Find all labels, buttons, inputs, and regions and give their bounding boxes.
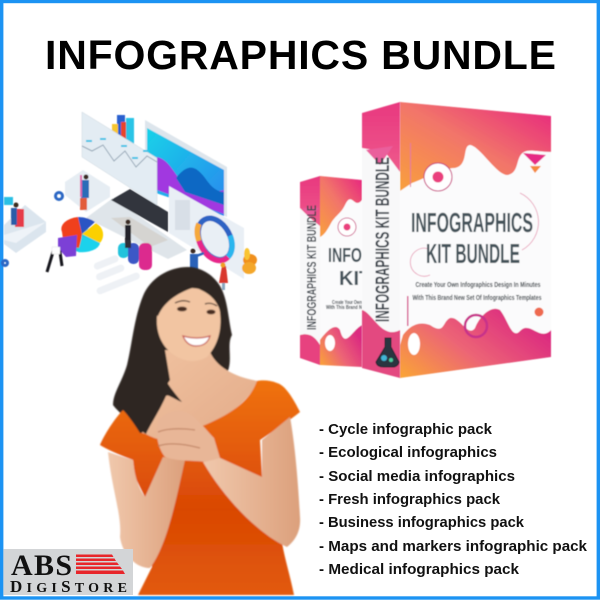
eyebrows: [175, 301, 217, 306]
worker on document stack: [65, 170, 110, 212]
large product box: KIT BUNDLE: [426, 238, 520, 269]
feature list: - Ecological infographics: [319, 445, 497, 461]
small product box: With This Brand N: [326, 305, 362, 311]
small box front: [320, 176, 362, 366]
small box spine: [300, 176, 320, 365]
percentage pills: [93, 254, 141, 295]
feature list: - Social media infographics: [319, 469, 515, 485]
desk with seated worker: [4, 197, 46, 253]
small box text: INFO: [328, 245, 362, 267]
clasped hands: [157, 411, 220, 462]
left arm: [108, 452, 185, 568]
logo: ABS DigiStore: [3, 549, 133, 596]
finger lines: [158, 429, 200, 448]
purple pie slice and figure: [47, 235, 77, 272]
woman: [100, 267, 300, 595]
bar chart icon behind panels: [112, 115, 134, 150]
large box spine: [362, 102, 400, 378]
hair strand over shoulder: [134, 345, 182, 434]
hair top: [146, 267, 224, 316]
large product box: With This Brand New Set Of Infographics Templates: [412, 293, 542, 302]
small product box: INFOGRAPHICS KIT BUNDLE: [304, 205, 319, 330]
laptop base: [86, 198, 187, 259]
feature list: [319, 422, 588, 578]
blue area chart screen: [145, 120, 227, 217]
small product box: Create Your Own: [332, 300, 362, 306]
feature list: - Business infographics pack: [319, 515, 525, 531]
flask logo on spine: [376, 338, 399, 367]
neck and chest: [140, 350, 258, 445]
illustration: isometric analytics dashboard: [2, 112, 257, 295]
large product box: [400, 102, 551, 378]
smile: [183, 336, 210, 346]
donut chart panel: [169, 186, 244, 279]
pie chart: [61, 217, 103, 252]
small product box: [300, 176, 371, 367]
small product box: KIT: [339, 268, 371, 290]
logo red stripes: [76, 554, 125, 574]
right arm: [203, 417, 300, 547]
feature list: - Maps and markers infographic pack: [319, 539, 588, 555]
box decorative circles: [407, 143, 546, 355]
feature list: - Medical infographics pack: [319, 562, 520, 578]
logo letters ABS: ABS: [11, 549, 72, 582]
figure in red dress: [219, 262, 228, 290]
hair back: [113, 267, 232, 434]
gear icons: [2, 192, 62, 266]
box subtitle: Create Your Own Infographics Design In Minutes: [416, 280, 540, 289]
feature list: - Cycle infographic pack: [319, 422, 493, 438]
logo wordmark DigiStore: D IGIS TORE: [10, 577, 127, 596]
bottom colour wave: [400, 309, 551, 378]
title: INFOGRAPHICS BUNDLE: [45, 32, 556, 78]
top colour wave: [400, 102, 551, 191]
pointing figure: [190, 248, 204, 270]
laptop keyboard: [111, 189, 168, 232]
feature list: - Fresh infographics pack: [319, 492, 501, 508]
line chart panel: [82, 112, 157, 205]
large box spine: INFOGRAPHICS KIT BUNDLE: [372, 157, 394, 322]
box front face: [400, 102, 551, 378]
eyes: [177, 307, 187, 311]
face: [157, 288, 220, 361]
cylinders with standing figure: [118, 220, 152, 270]
gold coins: [242, 248, 257, 274]
dress: [100, 380, 300, 595]
